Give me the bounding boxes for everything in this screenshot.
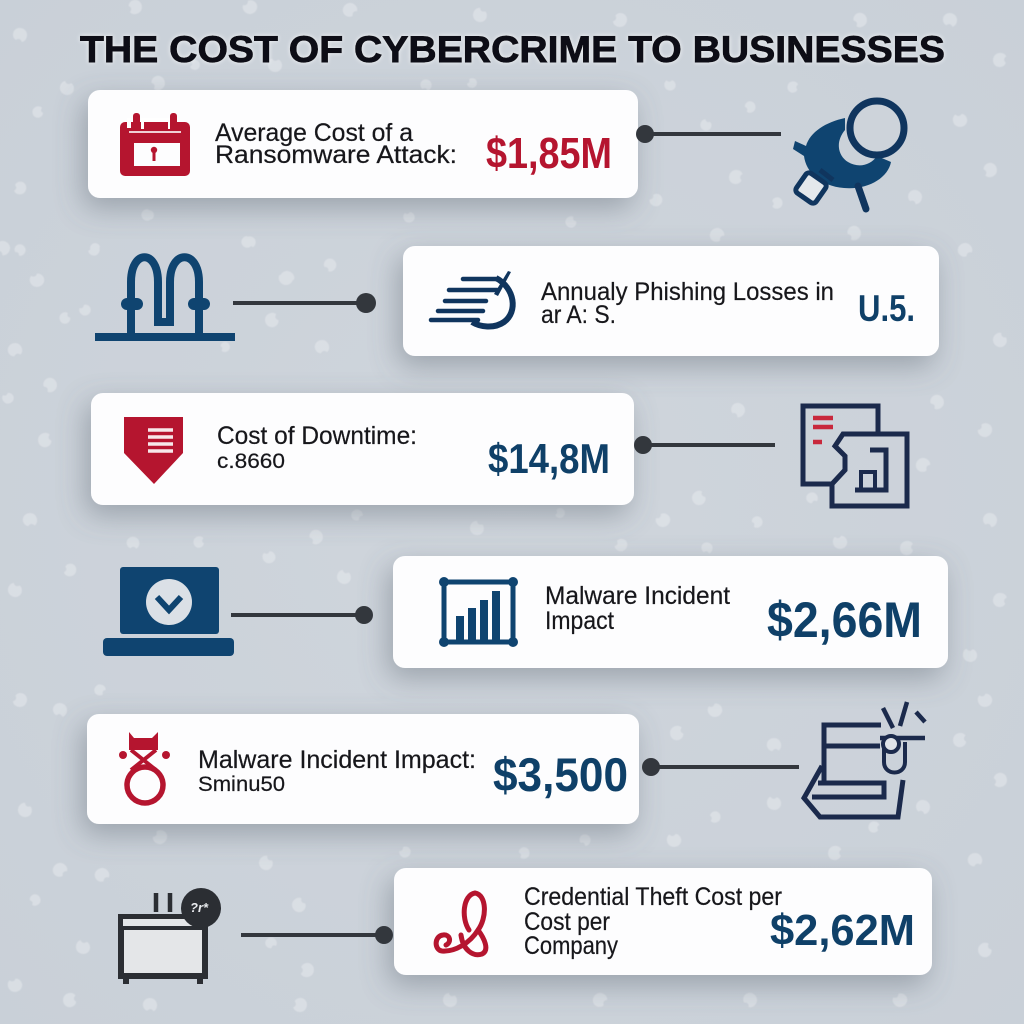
icon: red shield with lines xyxy=(124,417,183,484)
connector xyxy=(233,293,376,313)
connector xyxy=(642,758,799,776)
icon: red knot xyxy=(436,893,486,955)
icon: printer with badge: ?r* xyxy=(190,900,209,915)
panel: incident card xyxy=(87,714,639,824)
connector xyxy=(634,436,775,454)
icon: red calendar lock xyxy=(120,113,190,176)
label: average cost of ransomware: Average Cost of a xyxy=(215,119,413,147)
icon: printer with badge xyxy=(121,888,221,984)
label: malware incident impact: Malware Incident xyxy=(545,582,730,610)
connector xyxy=(241,926,393,944)
label: credential theft cost xyxy=(524,883,782,960)
value: U.S.: U.5. xyxy=(858,288,915,329)
value: $2,66M: $2,66M xyxy=(767,592,922,648)
label: cost of downtime: Cost of Downtime: xyxy=(217,422,417,450)
icon: double arch pipes xyxy=(95,257,235,341)
panel: downtime card xyxy=(91,393,634,505)
icon: document tray with plug xyxy=(804,702,925,817)
value: $1,85M: $1,85M xyxy=(486,129,612,178)
label: average cost of ransomware xyxy=(215,119,457,169)
panel: credential card xyxy=(394,868,932,975)
icon: bar chart frame xyxy=(439,577,518,647)
label: credential theft cost: Company xyxy=(524,932,618,960)
icon: overlapping documents xyxy=(803,406,907,506)
label: average cost of ransomware: Ransomware Attack: xyxy=(215,141,457,169)
value: $14,8M: $14,8M xyxy=(488,435,610,482)
label: malware incident impact: Sminu50 xyxy=(198,773,285,796)
icon: red ring figure xyxy=(119,732,170,803)
panel: ransomware card xyxy=(88,90,638,198)
row 2: phishing losses xyxy=(95,246,939,356)
label: credential theft cost: Cost per xyxy=(524,908,610,936)
label: annual phishing losses xyxy=(541,278,834,329)
icon: laptop with check xyxy=(103,567,234,656)
icon: magnifier and flashlight xyxy=(793,101,904,209)
row 5: malware impact $3,500 xyxy=(87,702,925,824)
label: malware incident impact: Malware Incident Impact: xyxy=(198,746,476,774)
title: THE COST OF CYBERCRIME TO BUSINESSES xyxy=(80,29,945,70)
label: credential theft cost: Credential Theft Cost per xyxy=(524,883,782,911)
connector xyxy=(636,125,781,143)
row 6: credential theft xyxy=(121,868,932,984)
label: cost of downtime: c.8660 xyxy=(217,450,285,473)
icon: speed lines with circle xyxy=(431,271,513,327)
row 4: malware impact xyxy=(103,556,948,668)
value: $2,62M: $2,62M xyxy=(770,906,915,955)
label: malware incident impact: Impact xyxy=(545,607,614,635)
value: $3,500: $3,500 xyxy=(493,748,628,801)
row 1: ransomware attack xyxy=(88,90,904,209)
panel: malware card xyxy=(393,556,948,668)
label: malware incident impact xyxy=(198,746,476,796)
row 3: downtime xyxy=(91,393,907,506)
label: cost of downtime xyxy=(217,422,417,473)
label: malware incident impact xyxy=(545,582,730,635)
label: annual phishing losses: ar A: S. xyxy=(541,301,616,329)
panel: phishing card xyxy=(403,246,939,356)
connector xyxy=(231,606,373,624)
label: annual phishing losses: Annualy Phishing Losses in xyxy=(541,278,834,306)
